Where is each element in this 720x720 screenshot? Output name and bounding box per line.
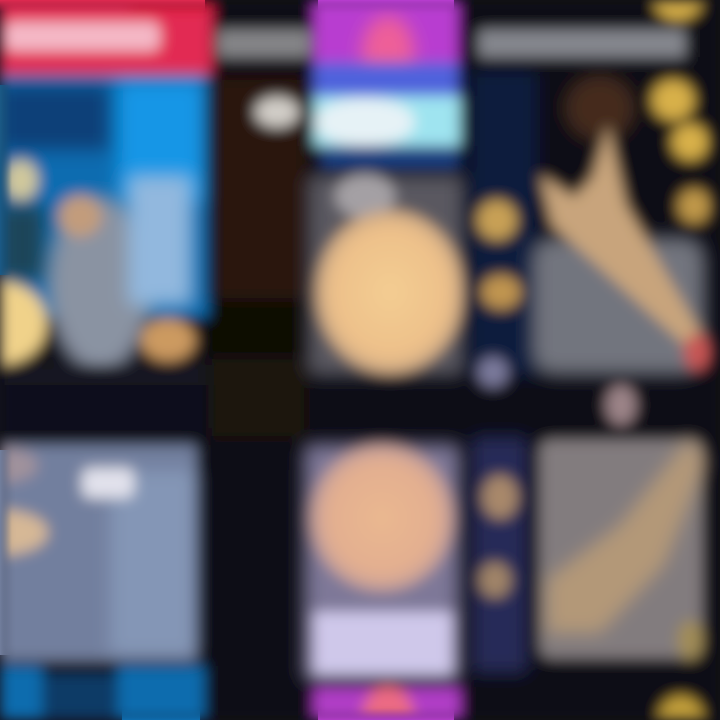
small yellow highlight	[4, 160, 38, 200]
reflected orb	[310, 444, 454, 592]
head highlight	[58, 195, 102, 237]
red header band	[0, 0, 212, 74]
reflected section	[305, 445, 459, 680]
large orb	[316, 210, 464, 374]
edge fill: top red	[0, 0, 205, 12]
panel: centre bright column	[305, 0, 464, 720]
red header corner	[130, 0, 210, 10]
edge fill: bottom magenta	[318, 708, 454, 720]
panel: left column	[0, 0, 212, 385]
dark horizon band	[0, 388, 208, 428]
white label blur	[82, 468, 134, 498]
edge fill: bottom blue	[122, 708, 200, 720]
hand shape	[540, 125, 702, 350]
edge fill: left blue	[0, 85, 12, 275]
red accent	[684, 334, 710, 370]
header text blur	[4, 22, 160, 51]
panel: centre dark column	[208, 30, 310, 720]
panel: right column	[470, 0, 710, 720]
top label blur	[218, 30, 310, 57]
reflected hand	[547, 437, 706, 633]
heading blur	[479, 30, 685, 57]
dark edge under scene	[0, 365, 208, 385]
white label blur	[255, 97, 299, 127]
orange highlight	[141, 319, 195, 361]
figure	[48, 197, 152, 373]
glowing orb	[0, 282, 46, 364]
yellow dots	[477, 0, 710, 309]
edge fill: top magenta	[318, 0, 454, 12]
edge fill: left grey	[0, 450, 12, 655]
panel: lower left reflection	[0, 445, 204, 720]
reflected block	[540, 440, 702, 658]
